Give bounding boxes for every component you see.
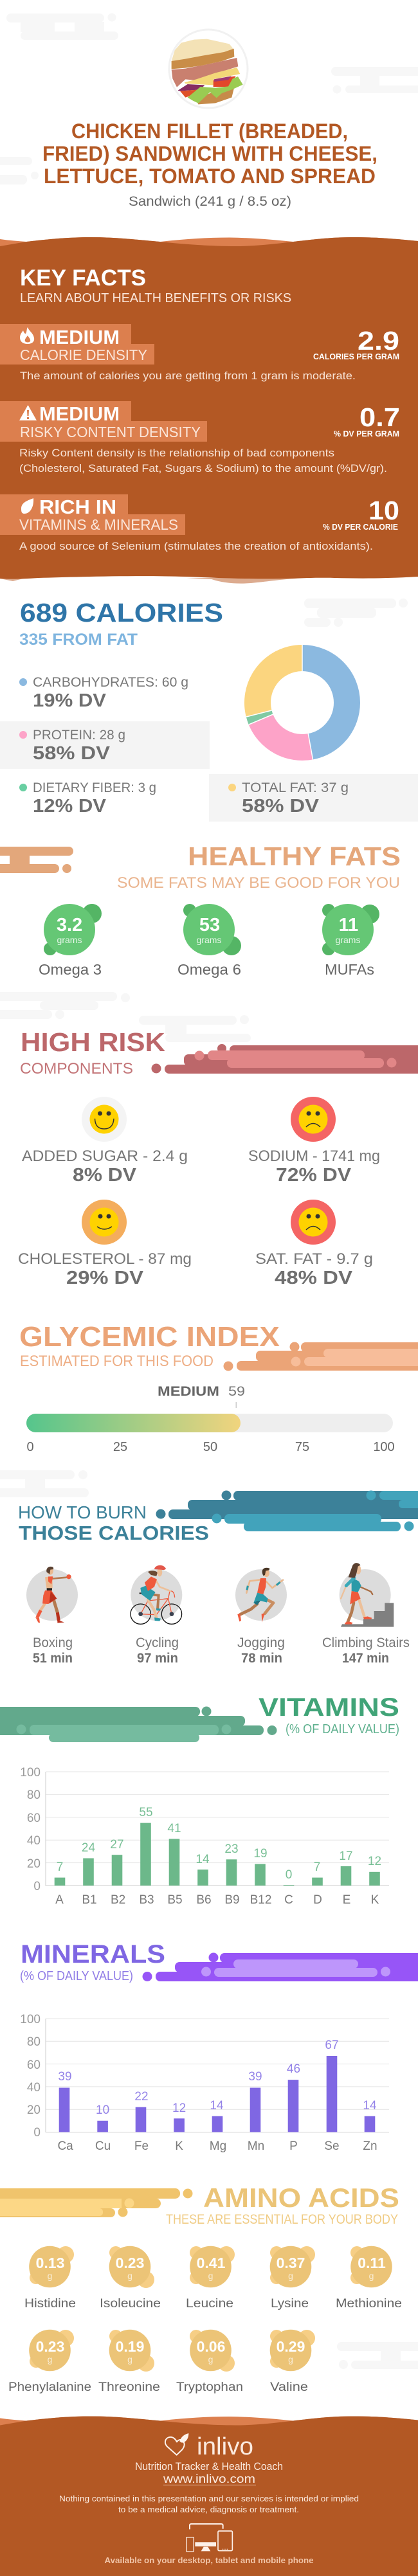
heading: HEALTHY FATS bbox=[188, 842, 401, 871]
fact: calorie density: 2.9 bbox=[358, 326, 399, 356]
component: added sugar bbox=[22, 1097, 188, 1185]
amino: leucine bbox=[186, 2246, 235, 2310]
panel: how to burn those calories: THOSE CALORIES bbox=[19, 1522, 209, 1544]
bar chart: vitamins: A bbox=[55, 1893, 64, 1907]
stat: omega 3: grams bbox=[57, 935, 82, 945]
fact: risky content density: Risky Content density is the relationship of bad components bbox=[19, 447, 334, 459]
bar chart: vitamins: 17 bbox=[339, 1850, 353, 1863]
amino: threonine bbox=[98, 2330, 160, 2394]
fact: risky content density: 0.7 bbox=[359, 402, 400, 432]
disclaimer bbox=[59, 2494, 359, 2514]
macro: total fat: TOTAL FAT: 37 g bbox=[242, 780, 349, 795]
amino: histidine: 0.13 bbox=[36, 2255, 64, 2271]
bar chart: vitamins: 14 bbox=[195, 1853, 210, 1866]
stat: omega 6 bbox=[177, 904, 241, 978]
fact: rich in vitamins and minerals: 10 bbox=[368, 496, 399, 525]
availability note: Available on your desktop, tablet and mobile phone bbox=[104, 2555, 314, 2565]
fact: risky content density: MEDIUM bbox=[39, 402, 120, 425]
bar chart: minerals: 14 bbox=[363, 2099, 377, 2112]
amino: phenylalanine: Phenylalanine bbox=[8, 2381, 91, 2394]
fact: calorie density bbox=[0, 324, 399, 382]
fact: rich in vitamins and minerals: % DV PER CALORIE bbox=[323, 522, 398, 532]
bar chart: vitamins: 40 bbox=[27, 1834, 41, 1848]
fact: calorie density: MEDIUM bbox=[39, 326, 120, 348]
amino: tryptophan: g bbox=[208, 2354, 213, 2364]
bar chart: minerals: Se bbox=[324, 2139, 340, 2153]
fact: calorie density: CALORIES PER GRAM bbox=[313, 352, 399, 361]
stat: omega 6: grams bbox=[197, 935, 221, 945]
exercise: cycling: 97 min bbox=[137, 1651, 178, 1666]
component: added sugar: ADDED SUGAR - 2.4 g bbox=[22, 1148, 188, 1165]
bar chart: vitamins: B9 bbox=[224, 1893, 240, 1907]
fact: risky content density: RISKY CONTENT DENSITY bbox=[20, 424, 201, 440]
bar chart: vitamins: 19 bbox=[253, 1847, 268, 1860]
gauge value bbox=[158, 1384, 245, 1408]
bar chart: vitamins: E bbox=[343, 1893, 350, 1907]
heading: calories: 689 CALORIES bbox=[20, 598, 223, 627]
amino: valine: Valine bbox=[270, 2381, 308, 2394]
macro: total fat bbox=[228, 780, 349, 816]
banner bbox=[156, 1490, 418, 1531]
banner bbox=[143, 1953, 418, 1981]
amino: threonine: g bbox=[127, 2354, 132, 2364]
macro: protein: PROTEIN: 28 g bbox=[33, 728, 125, 743]
website: www.inlivo.com bbox=[163, 2472, 255, 2485]
amino: isoleucine: Isoleucine bbox=[100, 2297, 161, 2310]
bar chart: minerals: 40 bbox=[27, 2081, 41, 2094]
stat: MUFAs: 11 bbox=[339, 915, 358, 935]
footer bbox=[0, 2416, 418, 2576]
exercise: jogging: 78 min bbox=[241, 1651, 282, 1666]
amino: leucine: Leucine bbox=[186, 2297, 233, 2310]
bar chart: vitamins: 24 bbox=[82, 1841, 95, 1855]
heading: HOW TO BURN bbox=[18, 1502, 147, 1522]
bar chart: vitamins: C bbox=[284, 1893, 293, 1907]
header: food photo bbox=[169, 30, 248, 108]
exercise: boxing: 51 min bbox=[33, 1651, 73, 1666]
bar chart: minerals: Fe bbox=[134, 2139, 149, 2153]
banner bbox=[224, 1342, 418, 1371]
heading: VITAMINS bbox=[259, 1693, 399, 1722]
macro: carbohydrates: 19% DV bbox=[33, 690, 107, 711]
panel: healthy fats bbox=[0, 842, 401, 978]
component: cholesterol bbox=[18, 1200, 192, 1288]
heading: MINERALS bbox=[21, 1940, 165, 1968]
bar chart: vitamins: B12 bbox=[250, 1893, 271, 1907]
bar chart: minerals: Mn bbox=[248, 2139, 264, 2153]
subheading: (% OF DAILY VALUE) bbox=[20, 1969, 133, 1983]
amino: methionine bbox=[336, 2246, 402, 2310]
bar chart: minerals: 0 bbox=[33, 2126, 41, 2139]
macro: carbohydrates: CARBOHYDRATES: 60 g bbox=[33, 675, 188, 690]
subheading: ESTIMATED FOR THIS FOOD bbox=[20, 1353, 214, 1370]
bar chart: vitamins: 23 bbox=[224, 1842, 239, 1856]
bar chart: minerals: Cu bbox=[95, 2139, 111, 2153]
amino: leucine: g bbox=[208, 2271, 213, 2281]
bar chart: minerals: 39 bbox=[58, 2070, 72, 2084]
component: saturated fat: 48% DV bbox=[275, 1268, 353, 1288]
exercise: climbing stairs: 147 min bbox=[342, 1651, 389, 1666]
macro: protein bbox=[19, 728, 125, 764]
fact: rich in vitamins and minerals: VITAMINS & MINERALS bbox=[19, 516, 178, 533]
bar chart: vitamins: K bbox=[371, 1893, 379, 1907]
bar chart: vitamins: B6 bbox=[196, 1893, 212, 1907]
heading: GLYCEMIC INDEX bbox=[19, 1321, 280, 1353]
bar chart: vitamins: 12 bbox=[368, 1855, 381, 1868]
macro: carbohydrates bbox=[19, 675, 188, 711]
bar chart: minerals: 14 bbox=[210, 2099, 224, 2112]
bar chart: vitamins bbox=[20, 1766, 389, 1907]
bar chart: minerals: Mg bbox=[210, 2139, 226, 2153]
fact: rich in vitamins and minerals: RICH IN bbox=[39, 496, 116, 518]
component: sodium: SODIUM - 1741 mg bbox=[248, 1148, 380, 1165]
gauge scale: 50 bbox=[203, 1440, 217, 1454]
bar chart: minerals: 100 bbox=[20, 2013, 41, 2026]
amino: leucine: 0.41 bbox=[197, 2255, 226, 2271]
component: cholesterol: 29% DV bbox=[66, 1268, 144, 1288]
fact: calorie density: CALORIE DENSITY bbox=[20, 347, 147, 363]
panel: glycemic index bbox=[19, 1321, 418, 1454]
bar chart: minerals: 39 bbox=[248, 2070, 262, 2084]
fact: rich in vitamins and minerals: A good source of Selenium (stimulates the creation of antioxidants). bbox=[19, 540, 373, 552]
gauge scale: 75 bbox=[295, 1440, 309, 1454]
amino: tryptophan: Tryptophan bbox=[176, 2381, 243, 2394]
component: added sugar: 8% DV bbox=[73, 1165, 137, 1185]
tagline: Nutrition Tracker & Health Coach bbox=[135, 2460, 283, 2472]
disclaimer: Nothing contained in this presentation and our services is intended or implied bbox=[59, 2494, 359, 2503]
gauge value: MEDIUM bbox=[158, 1384, 219, 1399]
amino: valine: 0.29 bbox=[277, 2338, 305, 2355]
exercise: jogging bbox=[235, 1568, 287, 1666]
amino: isoleucine bbox=[100, 2246, 161, 2310]
subheading: LEARN ABOUT HEALTH BENEFITS OR RISKS bbox=[20, 291, 291, 305]
bar chart: minerals: P bbox=[289, 2139, 298, 2153]
amino: lysine: 0.37 bbox=[277, 2255, 305, 2271]
amino: lysine: Lysine bbox=[271, 2297, 309, 2310]
macro: dietary fiber: 12% DV bbox=[33, 796, 107, 816]
icon: warning triangle bbox=[19, 405, 37, 420]
panel: amino acids bbox=[0, 2183, 402, 2394]
bar chart: minerals: 60 bbox=[27, 2058, 41, 2072]
amino: methionine: 0.11 bbox=[358, 2255, 386, 2271]
component: saturated fat bbox=[255, 1200, 373, 1288]
bar chart: vitamins: 60 bbox=[27, 1812, 41, 1825]
amino: histidine: Histidine bbox=[24, 2297, 76, 2310]
exercise: climbing stairs bbox=[322, 1563, 410, 1666]
fact: rich in vitamins and minerals bbox=[0, 494, 399, 552]
stat: MUFAs bbox=[322, 904, 379, 978]
amino: valine: g bbox=[288, 2354, 293, 2364]
subheading: COMPONENTS bbox=[20, 1060, 133, 1077]
amino: phenylalanine: 0.23 bbox=[36, 2338, 64, 2355]
gauge value: 59 bbox=[228, 1384, 245, 1399]
disclaimer: to be a medical advice, diagnosis or treatment. bbox=[118, 2505, 299, 2514]
component: saturated fat: SAT. FAT - 9.7 g bbox=[255, 1250, 373, 1268]
title: FRIED) SANDWICH WITH CHEESE, bbox=[42, 142, 377, 165]
amino: methionine: g bbox=[369, 2271, 374, 2281]
macro: protein: 58% DV bbox=[33, 743, 111, 764]
title: LETTUCE, TOMATO AND SPREAD bbox=[44, 165, 376, 188]
banner bbox=[152, 1044, 418, 1074]
exercise: cycling: Cycling bbox=[136, 1635, 179, 1650]
panel: minerals bbox=[20, 1940, 418, 2153]
title: CHICKEN FILLET (BREADED, bbox=[71, 120, 348, 143]
bar chart: minerals: Zn bbox=[363, 2139, 377, 2153]
gauge scale: 25 bbox=[113, 1440, 127, 1454]
bar chart: vitamins: B3 bbox=[139, 1893, 154, 1907]
gauge scale bbox=[26, 1440, 395, 1454]
bar chart: vitamins: 100 bbox=[20, 1766, 41, 1779]
bar chart: vitamins: D bbox=[313, 1893, 322, 1907]
stat: omega 6: Omega 6 bbox=[177, 961, 241, 978]
fact: calorie density: The amount of calories you are getting from 1 gram is moderate. bbox=[20, 370, 356, 382]
bar chart: minerals: 46 bbox=[287, 2062, 300, 2076]
component: sodium: 72% DV bbox=[276, 1165, 352, 1185]
component: cholesterol: CHOLESTEROL - 87 mg bbox=[18, 1250, 192, 1268]
bar chart: vitamins: 80 bbox=[27, 1788, 41, 1802]
bar chart: minerals: 20 bbox=[27, 2103, 41, 2117]
amino: phenylalanine bbox=[8, 2330, 91, 2394]
amino: phenylalanine: g bbox=[48, 2354, 52, 2364]
macro: dietary fiber bbox=[19, 780, 156, 816]
bar chart: vitamins: B2 bbox=[111, 1893, 125, 1907]
banner bbox=[0, 1706, 277, 1742]
amino: lysine: g bbox=[288, 2271, 293, 2281]
icon: leaf bbox=[21, 498, 33, 514]
icon: flame bbox=[20, 327, 34, 344]
panel: key facts bbox=[0, 237, 418, 584]
exercise: jogging: Jogging bbox=[237, 1635, 285, 1650]
amino: isoleucine: 0.23 bbox=[116, 2255, 144, 2271]
subheading: (% OF DAILY VALUE) bbox=[286, 1722, 399, 1736]
amino: methionine: Methionine bbox=[336, 2297, 402, 2310]
bar chart: vitamins: 20 bbox=[27, 1857, 41, 1871]
amino: tryptophan: 0.06 bbox=[197, 2338, 225, 2355]
exercise: climbing stairs: Climbing Stairs bbox=[322, 1635, 410, 1650]
bar chart: minerals: 22 bbox=[134, 2090, 149, 2103]
donut chart bbox=[244, 644, 361, 761]
stat: omega 3: 3.2 bbox=[57, 915, 82, 935]
bar chart: vitamins: 41 bbox=[167, 1822, 181, 1835]
stat: MUFAs: grams bbox=[336, 935, 360, 945]
component: sodium bbox=[248, 1097, 380, 1185]
exercise: boxing: Boxing bbox=[33, 1635, 73, 1650]
stat: omega 3 bbox=[39, 904, 102, 978]
subheading: SOME FATS MAY BE GOOD FOR YOU bbox=[117, 874, 400, 892]
fact: risky content density: % DV PER GRAM bbox=[334, 429, 399, 438]
gauge scale: 100 bbox=[373, 1440, 395, 1454]
amino: histidine: g bbox=[48, 2271, 52, 2281]
amino: isoleucine: g bbox=[127, 2271, 132, 2281]
bar chart: vitamins: B5 bbox=[167, 1893, 183, 1907]
bar chart: vitamins: 27 bbox=[110, 1838, 124, 1851]
bar chart: minerals: 67 bbox=[325, 2039, 339, 2052]
stat: MUFAs: MUFAs bbox=[325, 961, 374, 978]
amino: threonine: 0.19 bbox=[116, 2338, 144, 2355]
macro: total fat: 58% DV bbox=[242, 796, 320, 816]
bar chart: minerals: 10 bbox=[96, 2103, 109, 2117]
bar chart: vitamins: B1 bbox=[82, 1893, 97, 1907]
stat: omega 3: Omega 3 bbox=[39, 961, 102, 978]
amino: tryptophan bbox=[176, 2330, 243, 2394]
panel: how to burn those calories bbox=[18, 1490, 418, 1666]
heading: HIGH RISK bbox=[21, 1027, 165, 1057]
gauge bar bbox=[26, 1414, 393, 1432]
bar chart: minerals: 80 bbox=[27, 2035, 41, 2049]
bar chart: vitamins: 7 bbox=[314, 1860, 320, 1874]
title bbox=[42, 120, 377, 188]
heading: AMINO ACIDS bbox=[203, 2183, 399, 2213]
amino: lysine bbox=[270, 2246, 315, 2310]
logo wordmark: inlivo bbox=[197, 2433, 253, 2460]
bar chart: vitamins: 7 bbox=[57, 1860, 63, 1874]
subheading: from fat: 335 FROM FAT bbox=[19, 631, 138, 649]
fact: risky content density bbox=[0, 401, 400, 474]
macro: dietary fiber: DIETARY FIBER: 3 g bbox=[33, 780, 156, 795]
amino: threonine: Threonine bbox=[98, 2381, 160, 2394]
bar chart: minerals: 12 bbox=[172, 2102, 186, 2115]
bar chart: minerals: K bbox=[175, 2139, 183, 2153]
fact: risky content density: (Cholesterol, Saturated Fat, Sugars & Sodium) to the amount (%DV/gr). bbox=[19, 462, 387, 474]
amino: valine bbox=[270, 2330, 315, 2394]
bar chart: vitamins: 55 bbox=[139, 1806, 153, 1819]
amino: histidine bbox=[24, 2246, 76, 2310]
bar chart: vitamins: 0 bbox=[33, 1880, 41, 1893]
subtitle: serving size: Sandwich (241 g / 8.5 oz) bbox=[129, 194, 291, 209]
heading: key facts: KEY FACTS bbox=[20, 266, 146, 291]
icon: devices bbox=[186, 2524, 232, 2552]
gauge scale: 0 bbox=[26, 1440, 34, 1454]
bar chart: vitamins: 0 bbox=[286, 1868, 292, 1882]
panel: high risk components bbox=[18, 1027, 418, 1288]
exercise: cycling bbox=[131, 1565, 182, 1666]
panel: vitamins bbox=[0, 1693, 399, 1907]
bar chart: minerals bbox=[20, 2013, 389, 2153]
logo: heart and leaf bbox=[165, 2433, 188, 2455]
exercise: boxing bbox=[26, 1567, 78, 1666]
banner bbox=[0, 2188, 193, 2217]
stat: omega 6: 53 bbox=[199, 915, 220, 935]
banner bbox=[0, 847, 73, 873]
panel: calories and macronutrients bbox=[0, 598, 418, 822]
bar chart: minerals: Ca bbox=[57, 2139, 73, 2153]
